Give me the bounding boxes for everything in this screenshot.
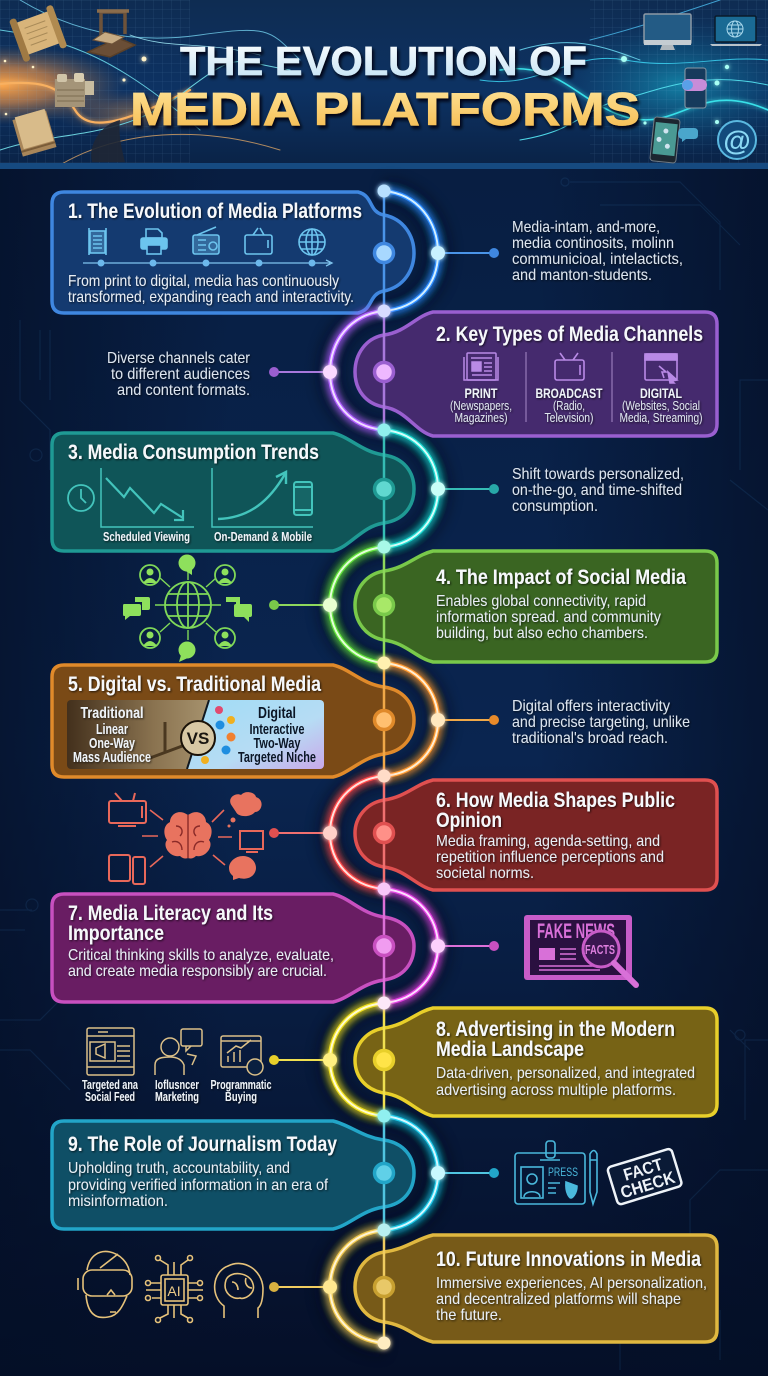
dividers and column labels: Television)	[544, 410, 594, 425]
side text: section 1	[512, 219, 683, 284]
panel 6 heading: Opinion	[436, 809, 502, 832]
pen	[590, 1150, 597, 1204]
panel 9: journalism	[52, 1121, 414, 1229]
dividers and column labels: BROADCAST	[536, 385, 603, 401]
panel 7 heading: 7. Media Literacy and Its	[68, 902, 273, 925]
icon cluster: media influencing brain	[109, 792, 263, 884]
icon: chat bubble	[678, 128, 698, 142]
connectors and end dots	[269, 248, 499, 1292]
panel 7 heading	[68, 902, 273, 945]
panel 6 body: societal norms.	[436, 865, 534, 882]
panel 6 heading: 6. How Media Shapes Public	[436, 789, 675, 812]
panel 3 heading: 3. Media Consumption Trends	[68, 441, 319, 464]
fact check stamp: CHECK	[618, 1168, 678, 1202]
panel 9 body	[68, 1160, 328, 1210]
traditional column: One-Way	[89, 735, 135, 752]
chart labels: On-Demand & Mobile	[214, 529, 312, 544]
icon cluster: social network globe	[123, 554, 252, 662]
panel 5: digital vs traditional	[52, 665, 414, 777]
side text: section 2	[107, 350, 251, 399]
press label: PRESS	[548, 1165, 578, 1179]
panel 9 body: misinformation.	[68, 1193, 168, 1210]
arc 3	[384, 430, 438, 547]
panel 8 body: advertising across multiple platforms.	[436, 1082, 676, 1099]
side text: section 3: Shift towards personalized,	[512, 466, 684, 483]
programmatic buying icon	[221, 1036, 263, 1075]
side text: section 3: on-the-go, and time-shifted	[512, 482, 682, 499]
side text: section 1: media continosits, molinn	[512, 235, 674, 252]
panel 9 heading: 9. The Role of Journalism Today	[68, 1133, 337, 1156]
panel 9 body: Upholding truth, accountability, and	[68, 1160, 290, 1177]
icon: television	[555, 353, 584, 380]
glowing arcs	[330, 191, 438, 1343]
title	[130, 38, 640, 135]
brain icon	[164, 812, 212, 858]
panel 7: media literacy	[52, 894, 414, 1002]
digital column: Two-Way	[254, 735, 301, 752]
panel 1 body: From print to digital, media has continuously	[68, 273, 339, 290]
influence arrows	[142, 810, 232, 867]
icon: old book	[12, 109, 57, 157]
digital column	[238, 705, 316, 766]
side text: section 1: Media-intam, and-more,	[512, 219, 660, 236]
icon: smartphone	[294, 482, 312, 515]
vs badge: VS	[187, 729, 209, 748]
icon labels: Targeted ana	[82, 1077, 139, 1092]
icon: at sign: @	[723, 125, 751, 156]
panel 8 body	[436, 1065, 695, 1099]
side text: section 2: and content formats.	[117, 382, 250, 399]
dividers and column labels: (Websites, Social	[622, 398, 700, 413]
panel 8: advertising	[355, 1008, 717, 1116]
panel 10: future innovations	[355, 1235, 717, 1342]
panel 8 heading: 8. Advertising in the Modern	[436, 1018, 675, 1041]
dividers and column labels: PRINT	[464, 385, 498, 401]
traditional column: Mass Audience	[73, 749, 151, 766]
speech bubble icon	[229, 856, 256, 880]
icon: vintage horn silhouette	[91, 120, 125, 162]
dividers and column labels: Media, Streaming)	[620, 410, 702, 425]
icon: at sign	[718, 121, 756, 159]
chart: on-demand rising	[212, 468, 313, 527]
panel 7 body	[68, 947, 334, 980]
panel 1 icon row: scroll, printer, radio, tv, globe	[89, 227, 325, 255]
arc 4	[330, 547, 384, 663]
icon cluster: press badge and fact check	[515, 1141, 682, 1205]
chart labels	[103, 529, 312, 544]
title line 2: MEDIA PLATFORMS	[130, 83, 640, 135]
side text: section 5	[512, 698, 690, 747]
icon labels: Ioflusncer	[155, 1077, 199, 1092]
vr headset	[78, 1251, 132, 1318]
arc 8	[330, 1003, 384, 1116]
side text: section 5: Digital offers interactivity	[512, 698, 670, 715]
panel 2: key types of media channels	[355, 312, 717, 436]
comparison graphic	[67, 700, 324, 769]
panel 5 heading: 5. Digital vs. Traditional Media	[68, 673, 321, 696]
panel 6 body: repetition influence perceptions and	[436, 849, 664, 866]
panel 1 body: transformed, expanding reach and interactivity.	[68, 289, 354, 306]
dividers and column labels: (Radio,	[553, 398, 585, 413]
chart: scheduled viewing decline	[101, 468, 194, 527]
panel 4: impact of social media	[355, 551, 717, 662]
arc 7	[384, 889, 438, 1003]
icon: desktop monitor	[644, 14, 691, 50]
arc 2	[330, 311, 384, 430]
arc 5	[384, 663, 438, 776]
press badge	[515, 1141, 585, 1204]
central timeline spine	[383, 191, 385, 1343]
side text: section 5: and precise targeting, unlike	[512, 714, 690, 731]
icon labels: Programmatic	[210, 1077, 272, 1092]
panel 1 mini timeline	[83, 260, 332, 266]
panel 9 body: providing verified information in an era of	[68, 1177, 328, 1194]
traditional column	[73, 705, 151, 766]
side text: section 3: consumption.	[512, 498, 598, 515]
panel 10 body: Immersive experiences, AI personalization,	[436, 1275, 707, 1292]
title line 1: THE EVOLUTION OF	[180, 38, 587, 84]
panel 8 heading: Media Landscape	[436, 1038, 584, 1061]
panel 4 heading: 4. The Impact of Social Media	[436, 566, 686, 589]
digital column: Interactive	[250, 721, 304, 738]
side text: section 1: and manton-students.	[512, 267, 652, 284]
fact check stamp: FACT	[621, 1155, 666, 1185]
panel 10 body	[436, 1275, 707, 1324]
tablet and phone icon	[109, 855, 145, 884]
panel 7 body: and create media responsibly are crucial.	[68, 963, 327, 980]
panel 8 heading	[436, 1018, 675, 1061]
icon: fake news tablet with magnifier	[524, 915, 636, 985]
arc 10	[330, 1230, 384, 1343]
dividers and column labels: (Newspapers,	[450, 398, 512, 413]
ai chip	[146, 1256, 203, 1322]
icon: laptop with globe	[710, 16, 762, 46]
digital column: Digital	[258, 705, 296, 722]
digital column: Targeted Niche	[238, 749, 316, 766]
side text: section 5: traditional's broad reach.	[512, 730, 668, 747]
traditional column: Traditional	[80, 705, 144, 722]
dark halos behind arcs	[330, 191, 438, 1343]
header banner	[0, 0, 768, 169]
panel 6 heading	[436, 789, 675, 832]
panel 7 heading: Importance	[68, 922, 164, 945]
panel 6 body	[436, 833, 664, 882]
traditional column: Linear	[96, 721, 128, 738]
panel 4 body: Enables global connectivity, rapid	[436, 593, 646, 610]
icon cluster: vr, ai and brain	[78, 1251, 263, 1322]
icon labels: Social Feed	[85, 1089, 135, 1104]
thought bubble icon	[228, 792, 262, 828]
dividers and column labels: DIGITAL	[640, 385, 682, 401]
icon: browser with cursor	[645, 354, 677, 383]
panel 10 heading: 10. Future Innovations in Media	[436, 1248, 701, 1271]
icon: fake news tablet with magnifier: FAKE NEWS	[537, 920, 615, 943]
dividers and column labels: Magazines)	[454, 410, 508, 425]
panel 10 body: and decentralized platforms will shape	[436, 1291, 681, 1308]
head with brain	[215, 1263, 263, 1318]
icon cluster: advertising	[82, 1028, 272, 1104]
panel 6: how media shapes public opinion	[355, 780, 717, 890]
panel 1 heading: 1. The Evolution of Media Platforms	[68, 200, 362, 223]
timeline nodes	[323, 184, 445, 1350]
panel 4 body: building, but also echo chambers.	[436, 625, 648, 642]
panel 8 body: Data-driven, personalized, and integrated	[436, 1065, 695, 1082]
targeted ads icon	[87, 1028, 134, 1075]
panel 4 body	[436, 593, 661, 642]
icon: clock	[68, 485, 94, 511]
icon labels	[82, 1077, 272, 1104]
dividers and column labels	[450, 352, 702, 425]
icon: ancient scroll	[9, 4, 67, 62]
side text: section 3	[512, 466, 684, 515]
side text: section 1: communicioal, intelacticts,	[512, 251, 683, 268]
fact check stamp	[607, 1148, 682, 1205]
icon: printing press	[88, 11, 135, 57]
tv icon	[109, 793, 146, 826]
panel 1: evolution of media platforms	[52, 192, 414, 313]
panel 3: media consumption trends	[52, 433, 414, 551]
arc 9	[384, 1116, 438, 1230]
icon: newspaper	[464, 353, 498, 380]
icon: early projector	[55, 73, 94, 107]
icon: smartphone with apps	[650, 117, 680, 163]
chart labels: Scheduled Viewing	[103, 529, 190, 544]
monitor icon	[240, 831, 263, 852]
icon labels: Marketing	[155, 1089, 199, 1104]
icon: smartphone	[682, 68, 707, 108]
side text: section 2: to different audiences	[111, 366, 250, 383]
arc 1	[384, 191, 438, 311]
panel 1 body	[68, 273, 354, 306]
panel 10 body: the future.	[436, 1307, 502, 1324]
influencer icon	[155, 1029, 202, 1075]
icon: fake news tablet with magnifier: FACTS	[585, 942, 615, 957]
vs badge	[181, 721, 215, 755]
panel 2 heading: 2. Key Types of Media Channels	[436, 323, 703, 346]
panel 6 body: Media framing, agenda-setting, and	[436, 833, 660, 850]
panel 7 body: Critical thinking skills to analyze, evaluate,	[68, 947, 334, 964]
ai chip: AI	[167, 1283, 181, 1299]
side text: section 2: Diverse channels cater	[107, 350, 251, 367]
panel 4 body: information spread. and community	[436, 609, 661, 626]
icon labels: Buying	[225, 1089, 257, 1104]
arc 6	[330, 776, 384, 889]
